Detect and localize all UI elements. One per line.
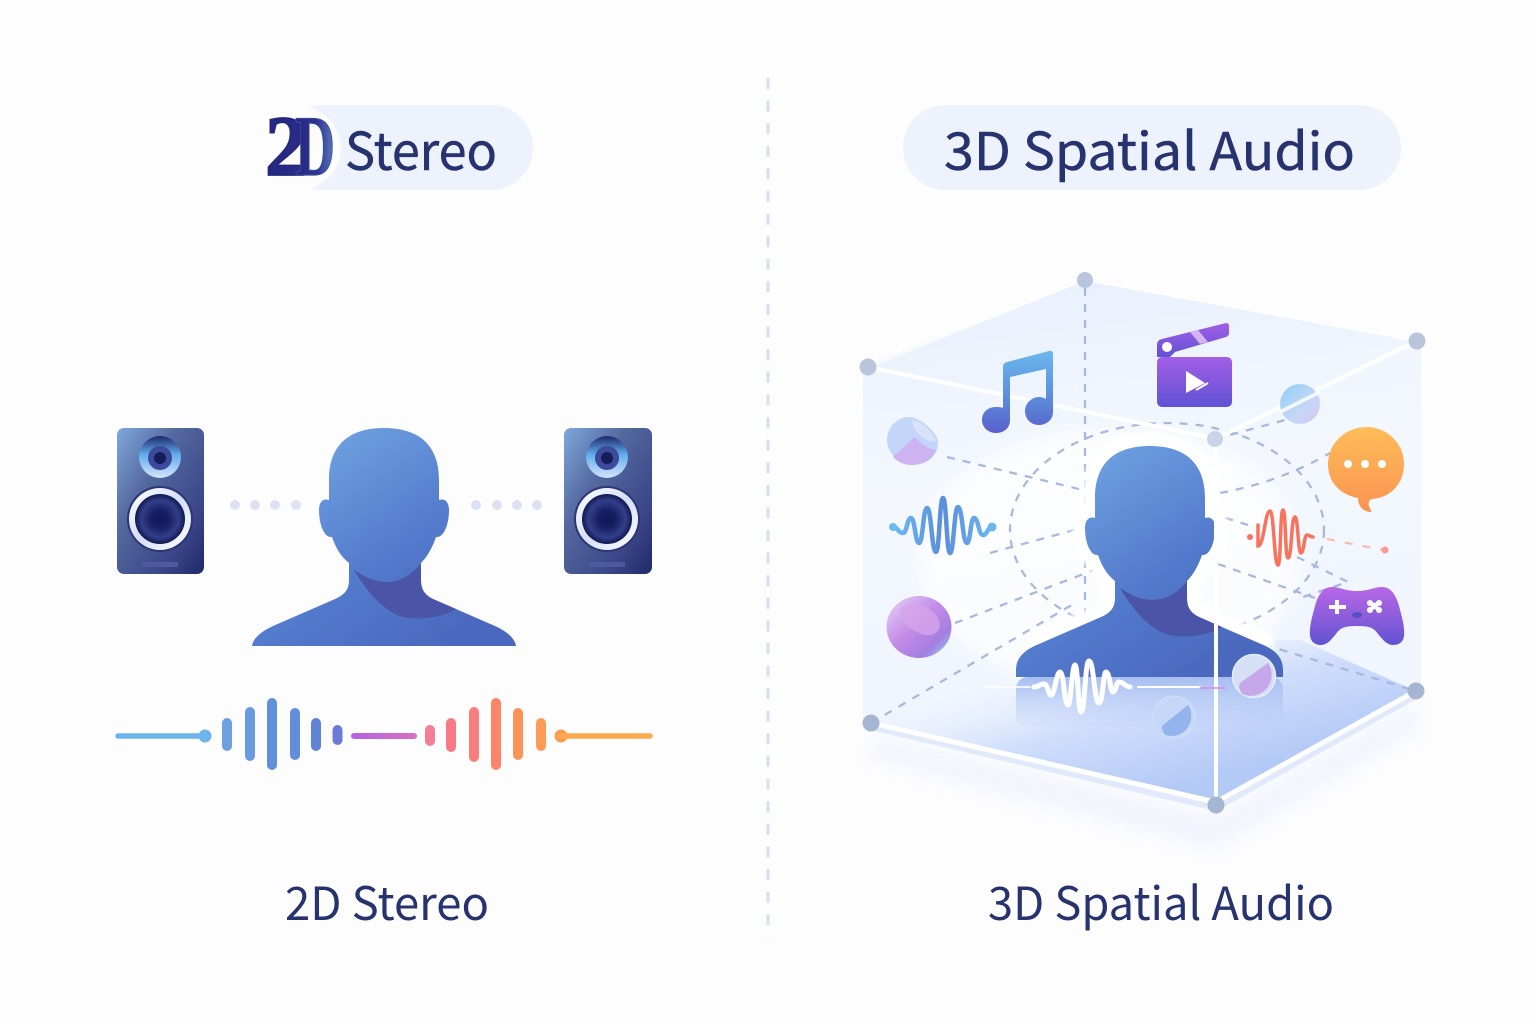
heading: 2D Stereo badge: Stereo [345, 110, 497, 185]
icon: music note [982, 351, 1053, 433]
listener silhouette [252, 428, 516, 646]
cube corner nodes [860, 272, 1426, 814]
icon: white chest waveform [984, 661, 1225, 712]
listener silhouette in cube [1016, 446, 1283, 727]
icon: left speaker [117, 428, 204, 574]
icon: glass sphere on shoulder [1232, 654, 1276, 698]
caption: 3D Spatial Audio: 3D Spatial Audio [988, 868, 1334, 934]
heading: 2D Stereo badge: 2 [265, 98, 307, 194]
icon: right speaker [564, 428, 652, 574]
cube frame [868, 280, 1417, 808]
red dashed trail [1327, 539, 1388, 554]
icon: speech bubble [1328, 427, 1404, 512]
icon: glass blob upper left [887, 417, 938, 465]
icon: red waveform [1248, 510, 1313, 565]
caption: 2D Stereo: 2D Stereo [285, 868, 489, 934]
icon: game controller [1310, 587, 1404, 645]
heading: 2D Stereo badge [243, 98, 533, 194]
icon: film clapperboard [1157, 323, 1232, 407]
icon: blue waveform [889, 498, 996, 553]
stereo waveform [118, 703, 650, 765]
left dotted connector [230, 500, 301, 510]
panel: 2D stereo [117, 98, 652, 934]
dashed sound paths [868, 288, 1416, 723]
icon: glass sphere on floor [1153, 696, 1195, 738]
cube back faces and floor [863, 280, 1421, 850]
panel: 3D spatial audio [860, 105, 1426, 934]
heading: 2D Stereo badge: D [295, 98, 335, 194]
icon: purple sphere [886, 596, 952, 658]
heading: 3D Spatial Audio badge: 3D Spatial Audio [944, 110, 1355, 185]
right dotted connector [471, 500, 542, 510]
listener halo [1039, 446, 1261, 644]
icon: glass sphere upper right [1280, 384, 1320, 424]
